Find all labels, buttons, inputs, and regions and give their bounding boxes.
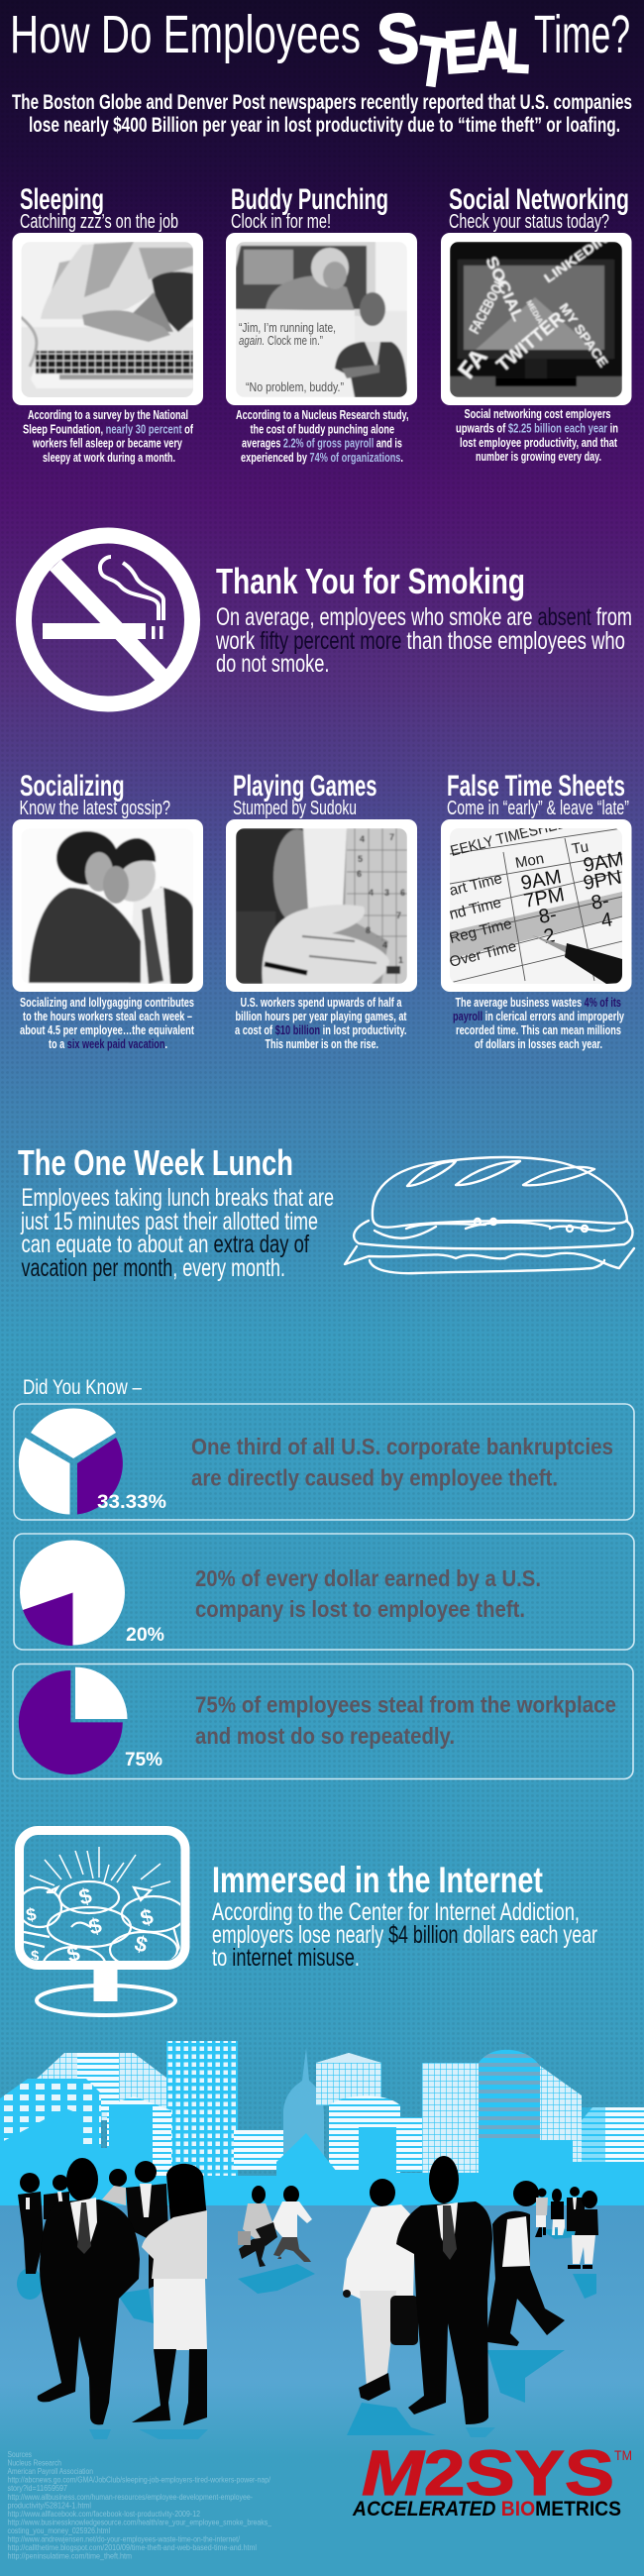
panel: social networking (441, 183, 632, 464)
floor reflections (17, 2229, 596, 2439)
icon: sandwich (345, 1157, 634, 1273)
caption (235, 995, 407, 1051)
panel: the one week lunch: Employees taking lunch breaks that are (22, 1184, 334, 1212)
caption (456, 406, 618, 464)
panel: the one week lunch: The One Week Lunch (18, 1142, 293, 1183)
panel: the one week lunch: vacation per month, every month. (22, 1254, 285, 1282)
people: right group (343, 2156, 598, 2424)
photo: timesheet and pen: Reg Time (448, 915, 513, 947)
panel: playing games: Stumped by Sudoku (233, 798, 357, 819)
people: two women walking (238, 2186, 312, 2267)
panel: thank you for smoking: Thank You for Smoking (216, 561, 525, 601)
panel: socializing: Socializing (20, 770, 125, 803)
photo: timesheet and pen: 8- (537, 904, 558, 928)
figure: woman in white trousers (343, 2179, 415, 2401)
figure: main man in suit (38, 2158, 140, 2424)
figure: man in suit on phone (396, 2156, 492, 2424)
panel: the one week lunch: just 15 minutes past their allotted time (20, 1208, 318, 1235)
caption: This number is on the rise. (266, 1036, 378, 1051)
panel: twenty percent statistic: 20% of every dollar earned by a U.S. (195, 1565, 541, 1591)
caption: According to a survey by the National (28, 407, 188, 422)
caption: Socializing and lollygagging contributes (20, 995, 194, 1010)
sources: http://abcnews.go.com/GMA/JobClub/sleeping-job-employers-tired-workers-power-nap/ (8, 2476, 271, 2485)
sources: http://peninsulatime.com/time_theft.htm (8, 2552, 132, 2561)
photo: two men gossiping (21, 828, 194, 984)
photo: monitor with social network names (450, 231, 622, 397)
photo: monitor with social network names: MEDIA (524, 299, 545, 326)
panel: immersed in the internet (212, 1860, 597, 1972)
photo: sudoku puzzle and hand: 7 (396, 911, 401, 920)
caption: According to a Nucleus Research study, (236, 407, 408, 422)
icon: monitor with money bags: $ (76, 1882, 94, 1910)
panel: buddy punching: Buddy Punching (231, 183, 388, 216)
sources: American Payroll Association (8, 2467, 93, 2476)
photo: timesheet and pen: art Time (448, 870, 504, 900)
logo: M2SYS accelerated biometrics (352, 2437, 632, 2521)
panel: immersed in the internet: to internet misuse. (212, 1944, 360, 1972)
caption: the cost of buddy punching alone (250, 422, 394, 436)
people: left group (18, 2158, 207, 2425)
panel: twenty percent statistic: company is lost to employee theft. (195, 1596, 525, 1622)
panel: socializing: Know the latest gossip? (20, 798, 170, 819)
panel: the one week lunch: can equate to about an extra day of (22, 1231, 309, 1258)
caption: The average business wastes 4% of its (456, 995, 621, 1010)
photo: timesheet and pen: Tu (571, 838, 590, 858)
caption: averages 2.2% of gross payroll and is (242, 436, 402, 450)
icon: monitor with money bags: $ (31, 1948, 40, 1965)
photo: monitor with social network names: MY SPACE (557, 300, 611, 370)
pie chart: 33.33% (19, 1409, 166, 1514)
caption: upwards of $2.25 billion each year in (456, 420, 618, 436)
photo: sudoku puzzle and hand: 4 (382, 940, 387, 950)
panel: false time sheets (441, 770, 632, 1051)
title word: STEAL: A (474, 8, 512, 84)
title: How Do Employees (10, 5, 361, 64)
caption: a cost of $10 billion in lost productivity. (235, 1022, 406, 1037)
icon: monitor with money bags: $ (64, 1940, 82, 1968)
logo: M2SYS accelerated biometrics: M2SYS (362, 2437, 614, 2509)
photo: timesheet and pen: 4 (599, 909, 614, 932)
sources: story?id=11659597 (8, 2484, 67, 2493)
panel: immersed in the internet: employers lose nearly $4 billion dollars each year (212, 1921, 597, 1949)
figure: far right group (535, 2187, 598, 2269)
photo: buddy punching phone call: “No problem, buddy.” (246, 380, 344, 394)
photo: sudoku puzzle and hand: 6 (400, 888, 405, 898)
panel: sleeping: Catching zzz’s on the job (20, 211, 178, 233)
intro text (12, 91, 632, 137)
title word: STEAL: E (442, 18, 481, 86)
sources: costing_you_money_025926.html (8, 2526, 110, 2535)
pie chart: 20%: 20% (126, 1625, 164, 1646)
icon: no smoking (24, 535, 192, 703)
icon: monitor with money bags (18, 1831, 185, 2015)
skyline foreground blocks (0, 2105, 644, 2205)
photo: sudoku puzzle and hand: 9 (365, 955, 370, 965)
panel: thank you for smoking: do not smoke. (216, 650, 329, 678)
figure: background man (18, 2161, 170, 2289)
panel: thank you for smoking: On average, employees who smoke are absent from (216, 603, 632, 631)
panel: twenty percent statistic (14, 1534, 634, 1650)
pie chart: 20% (20, 1540, 164, 1646)
caption: workers fell asleep or became very (32, 436, 183, 450)
panel: buddy punching: Clock in for me! (231, 211, 331, 233)
photo: monitor with social network names: SOCIAL (482, 255, 526, 324)
photo: buddy punching phone call (236, 242, 407, 397)
panel: thank you for smoking (215, 561, 632, 678)
icon: monitor with money bags: $ (138, 1903, 156, 1931)
pie chart: 75% (19, 1667, 162, 1774)
icon: monitor with money bags: $ (25, 1904, 38, 1925)
photo: sudoku puzzle and hand: 7 (389, 832, 394, 842)
title (10, 0, 630, 103)
caption: sleepy at work during a month. (43, 450, 175, 465)
photo: sudoku puzzle and hand: 4 (360, 834, 365, 844)
panel: playing games (226, 770, 417, 1051)
caption: experienced by 74% of organizations. (241, 450, 403, 465)
photo: sudoku puzzle and hand: 5 (358, 854, 363, 864)
photo: monitor with social network names: FA (453, 344, 493, 384)
panel: socializing (12, 770, 203, 1051)
panel: one third statistic: are directly caused by employee theft. (191, 1464, 558, 1490)
ground (0, 2205, 644, 2457)
caption: to the hours workers steal each week – (23, 1009, 192, 1023)
panel: the one week lunch (18, 1142, 334, 1282)
title word: STEAL: S (376, 0, 421, 78)
photo: timesheet and pen: 9AM (582, 848, 625, 877)
photo: timesheet and pen (450, 828, 622, 984)
sources: http://www.allfacebook.com/facebook-lost-productivity-2009-12 (8, 2510, 200, 2519)
caption: Sleep Foundation, nearly 30 percent of (23, 422, 193, 436)
panel: immersed in the internet: Immersed in the Internet (212, 1860, 543, 1900)
sources: http://www.businessknowledgesource.com/health/are_your_employee_smoke_breaks_ (8, 2518, 271, 2526)
pie chart: 33.33%: 33.33% (97, 1492, 166, 1513)
caption: billion hours per year playing games, at (236, 1009, 407, 1023)
caption: about 4.5 per employee…the equivalent (20, 1022, 194, 1037)
photo: timesheet and pen: nd Time (448, 894, 503, 923)
photo: monitor with social network names: FACEBOOK (467, 274, 510, 337)
figure: briefcase (390, 2296, 418, 2345)
photo: timesheet and pen: Mon (514, 850, 545, 872)
photo: sudoku puzzle and hand (236, 828, 407, 984)
title word: STEAL: L (504, 17, 532, 86)
photo: timesheet and pen: Over Time (448, 938, 518, 971)
caption: to a six week paid vacation. (49, 1036, 167, 1051)
sources: http://callthetime.blogspot.com/2010/09/time-theft-and-web-based-time-and.html (8, 2543, 257, 2552)
title word: STEAL (376, 0, 532, 103)
panel: sleeping (12, 183, 203, 465)
photo: monitor with social network names: LINKEDIN (541, 231, 610, 285)
sources: productivity/528124-1.html (8, 2501, 91, 2510)
panel: seventy-five percent statistic: and most do so repeatedly. (195, 1723, 455, 1749)
photo: timesheet and pen: 2 (542, 924, 557, 948)
panel: sleeping: Sleeping (20, 183, 104, 216)
photo: sudoku puzzle and hand: 8 (366, 925, 371, 935)
photo: sudoku puzzle and hand: 6 (357, 869, 362, 879)
photo: sudoku puzzle and hand: 1 (398, 955, 403, 965)
caption: U.S. workers spend upwards of half a (240, 995, 402, 1010)
sources: Nucleus Research (8, 2459, 61, 2468)
logo: M2SYS accelerated biometrics: TM (614, 2447, 632, 2463)
panel: one third statistic (14, 1404, 634, 1520)
figure: man walking away (487, 2181, 565, 2346)
photo: monitor with social network names: TWITTER (493, 308, 569, 376)
photo: timesheet and pen: EEKLY TIMESHEET (449, 812, 576, 860)
panel: seventy-five percent statistic (13, 1664, 633, 1779)
caption (236, 407, 408, 465)
photo: timesheet and pen: 9PN (582, 867, 623, 895)
icon: monitor with money bags: $ (86, 1912, 104, 1940)
sources: Sources (8, 2450, 32, 2459)
caption (453, 995, 625, 1051)
photo: buddy punching phone call: again. Clock me in.” (239, 334, 323, 348)
city skyline (0, 2041, 644, 2205)
title word: STEAL: T (412, 22, 456, 103)
photo: timesheet and pen: 9AM (519, 866, 563, 895)
caption (20, 995, 194, 1051)
logo: M2SYS accelerated biometrics: ACCELERATED BIOMETRICS (352, 2498, 621, 2521)
sources: http://www.andrewjensen.net/do-your-employees-waste-time-on-the-internet/ (8, 2534, 241, 2544)
photo: sudoku puzzle and hand: 3 (384, 888, 389, 898)
sources: http://www.allbusiness.com/human-resources/employee-development-employee- (8, 2493, 253, 2502)
caption (23, 407, 193, 465)
photo: timesheet and pen: 8- (590, 890, 610, 914)
panel: buddy punching (226, 183, 417, 465)
sources (8, 2450, 271, 2561)
photo: worker asleep at keyboard (21, 242, 194, 398)
heading: did you know: Did You Know – (23, 1376, 142, 1399)
panel: playing games: Playing Games (233, 770, 377, 803)
photo: buddy punching phone call: “Jim, I’m running late, (239, 321, 336, 335)
photo: timesheet and pen: 7PM (522, 884, 566, 912)
pie chart: 75%: 75% (125, 1750, 162, 1771)
icon: monitor with money bags: $ (132, 1930, 150, 1958)
photo: sudoku puzzle and hand: 4 (369, 888, 374, 898)
figure: woman in white suit (132, 2164, 207, 2425)
